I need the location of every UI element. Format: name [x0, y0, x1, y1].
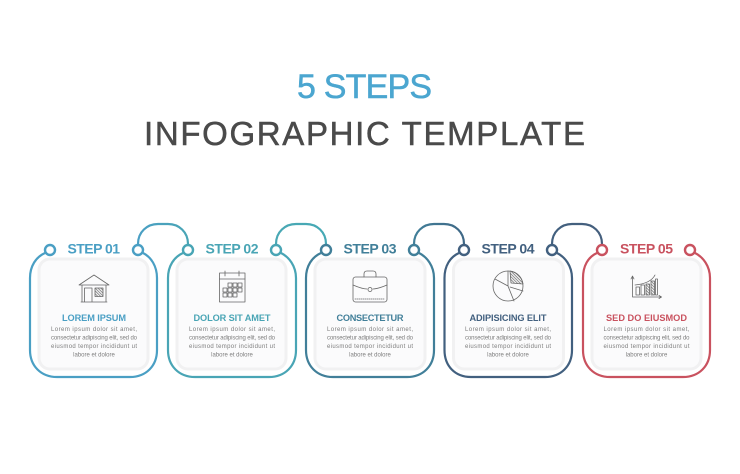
icon: house [79, 275, 109, 302]
step label: STEP 01 [68, 240, 120, 256]
body text: consectetur adipiscing elit, sed do [327, 336, 414, 342]
body text: Lorem ipsum dolor sit amet, [189, 327, 275, 333]
icon: bar chart [631, 275, 662, 298]
node right [685, 245, 695, 255]
body text [327, 327, 414, 358]
body text: Lorem ipsum dolor sit amet, [327, 327, 413, 333]
heading: SED DO EIUSMOD [606, 313, 687, 323]
body text: Lorem ipsum dolor sit amet, [465, 327, 551, 333]
node left [459, 245, 469, 255]
body text: consectetur adipiscing elit, sed do [51, 336, 138, 342]
body text: consectetur adipiscing elit, sed do [189, 336, 276, 342]
card [454, 259, 564, 369]
node right [271, 245, 281, 255]
body text: Lorem ipsum dolor sit amet, [51, 327, 137, 333]
body text: labore et dolore [349, 352, 392, 358]
body text: labore et dolore [487, 352, 530, 358]
card [315, 259, 425, 369]
title [144, 68, 585, 152]
node left [321, 245, 331, 255]
card [592, 259, 701, 369]
icon: calendar [220, 271, 245, 302]
connector: step 3 to 4 [414, 224, 464, 244]
body text: labore et dolore [211, 352, 254, 358]
panel: step 2 [168, 240, 296, 377]
title line: infographic template: INFOGRAPHIC TEMPLATE [144, 115, 585, 152]
panel: step 1 [30, 240, 157, 377]
connector: step 4 to 5 [552, 224, 602, 244]
node left [597, 245, 607, 255]
body text: eiusmod tempor incididunt ut [604, 344, 690, 350]
body text: eiusmod tempor incididunt ut [189, 344, 275, 350]
step label: STEP 03 [344, 240, 397, 256]
heading: LOREM IPSUM [62, 313, 126, 323]
step label: STEP 04 [482, 240, 535, 256]
icon: pie chart [493, 271, 523, 301]
node right [409, 245, 419, 255]
connector: step 2 to 3 [276, 224, 326, 244]
connector: step 1 to 2 [138, 224, 188, 244]
body text [189, 327, 276, 358]
body text: consectetur adipiscing elit, sed do [604, 336, 690, 342]
node right [547, 245, 557, 255]
body text: eiusmod tempor incididunt ut [327, 344, 413, 350]
body text: consectetur adipiscing elit, sed do [465, 336, 552, 342]
body text: Lorem ipsum dolor sit amet, [604, 327, 690, 333]
body text: eiusmod tempor incididunt ut [465, 344, 551, 350]
node left [183, 245, 193, 255]
panel: step 4 [444, 240, 572, 377]
card [39, 259, 148, 369]
outline [30, 253, 157, 377]
body text: labore et dolore [626, 352, 668, 358]
body text: labore et dolore [73, 352, 116, 358]
title line: 5 steps: 5 STEPS [297, 68, 432, 106]
heading: DOLOR SIT AMET [194, 313, 271, 323]
step label: STEP 02 [206, 240, 259, 256]
outline [583, 253, 710, 377]
node right [133, 245, 143, 255]
body text [51, 327, 138, 358]
outline [168, 253, 296, 377]
card [177, 259, 286, 369]
outline [444, 253, 572, 377]
icon: briefcase [353, 271, 387, 302]
step label: STEP 05 [620, 240, 673, 256]
panel: step 5 [583, 240, 710, 377]
heading: ADIPISICING ELIT [470, 313, 547, 323]
outline [306, 253, 434, 377]
body text [604, 327, 690, 358]
body text [465, 327, 552, 358]
node left [45, 245, 55, 255]
panel: step 3 [306, 240, 434, 377]
heading: CONSECTETUR [336, 313, 404, 323]
body text: eiusmod tempor incididunt ut [51, 344, 137, 350]
